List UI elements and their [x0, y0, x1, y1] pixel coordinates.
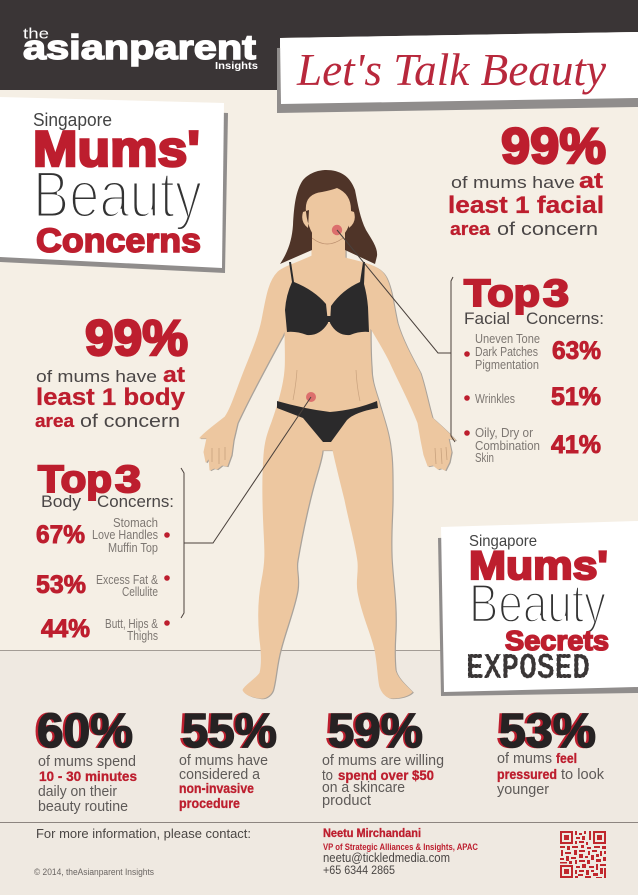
stat: 60% daily routine: 60% — [34, 705, 132, 758]
finger creases — [212, 447, 447, 464]
stat: 59% spend over $50: 59% — [326, 705, 422, 758]
list: facial concerns: Skin — [475, 451, 494, 465]
stat: 53% feel pressured: of mums — [497, 751, 552, 767]
stat: 53% feel pressured: pressured — [497, 766, 557, 782]
stat: 59% spend over $50: spend over $50 — [338, 767, 434, 783]
heading: top 3 body concerns: 3 — [115, 459, 141, 501]
list: body concerns: Stomach — [113, 516, 158, 530]
list: facial concerns: Wrinkles — [475, 392, 515, 406]
panel: Mums' Beauty Concerns: Mums' — [33, 121, 200, 177]
stat: 60% daily routine: 60% — [37, 705, 133, 758]
banner: Let's Talk Beauty — [277, 32, 638, 113]
stat: 60% daily routine — [34, 705, 137, 815]
list: facial concerns: Oily, Dry or — [475, 426, 533, 440]
stat: body 99%: of mums have — [36, 367, 157, 386]
stat: body 99%: at — [163, 362, 186, 387]
briefs — [277, 401, 378, 442]
connector: body to body concerns — [181, 397, 311, 618]
heading: top 3 body concerns: Concerns: — [97, 492, 174, 511]
marker: face concern — [332, 225, 342, 235]
stat: facial 99%: at — [579, 168, 604, 193]
illustration: woman figure — [200, 170, 456, 699]
list: body concerns: Thighs — [127, 629, 158, 643]
stat: facial 99%: 99% — [501, 118, 606, 174]
stat: 59% spend over $50: on a skincare — [322, 780, 405, 796]
list: body concerns: Muffin Top — [108, 541, 158, 555]
list: facial concerns: 51% — [551, 383, 601, 411]
logo: the — [23, 26, 49, 42]
panel: Mums' Beauty Secrets Exposed — [438, 521, 638, 696]
list: body concerns: Cellulite — [122, 585, 158, 599]
logo — [23, 26, 258, 72]
stat: 55% non-invasive: procedure — [179, 795, 240, 811]
header band — [0, 0, 638, 90]
list: body concerns: Excess Fat & — [96, 573, 159, 587]
list: facial concerns: Uneven Tone — [475, 332, 540, 346]
stat: facial 99%: of concern — [497, 219, 598, 239]
stat: body 99% — [35, 310, 188, 431]
stat: 59% spend over $50: 59% — [328, 705, 423, 758]
stat: 55% non-invasive: 55% — [182, 705, 277, 758]
list: body concerns: Love Handles — [92, 528, 158, 542]
footer: contact details: neetu@tickledmedia.com — [323, 851, 450, 865]
stat: body 99%: 99% — [85, 310, 188, 366]
stat: 53% feel pressured: younger — [497, 782, 549, 798]
footer: contact prompt: For more information, please contact: — [36, 826, 251, 841]
stat: facial 99%: least 1 facial — [448, 192, 604, 219]
stat: 55% non-invasive: of mums have — [179, 753, 268, 769]
panel: Mums' Beauty Secrets Exposed: Mums' — [469, 544, 608, 588]
heading: top 3 facial concerns: Concerns: — [526, 309, 604, 328]
stat: facial 99% — [448, 118, 606, 239]
panel: Mums' Beauty Secrets Exposed: Secrets — [505, 625, 609, 656]
panel: Mums' Beauty Concerns: Concerns — [36, 222, 201, 260]
heading: top 3 facial concerns: 3 — [543, 273, 569, 315]
stat: body 99%: area — [35, 411, 75, 431]
panel: Mums' Beauty Concerns — [0, 97, 228, 273]
panel: Mums' Beauty Secrets Exposed: EXPOSED — [466, 648, 590, 689]
footer: contact details: Neetu Mirchandani — [323, 828, 421, 840]
stat: facial 99%: area — [450, 219, 491, 239]
stat: 55% non-invasive — [179, 705, 277, 811]
connector: face to facial concerns — [337, 230, 455, 442]
stat: 53% feel pressured: 53% — [499, 705, 596, 758]
body creases — [293, 370, 360, 401]
stat: 59% spend over $50 — [322, 705, 444, 809]
list: body concerns — [36, 516, 170, 643]
panel: Mums' Beauty Concerns: Beauty — [33, 157, 202, 231]
footer: contact details — [323, 828, 479, 877]
list: facial concerns: Dark Patches — [475, 345, 538, 359]
stat: body 99%: least 1 body — [36, 384, 186, 411]
heading: top 3 facial concerns: Top — [464, 273, 540, 315]
stat: facial 99%: of mums have — [451, 173, 575, 192]
footer: contact details: VP of Strategic Alliances & Insights, APAC — [323, 842, 479, 852]
panel: Mums' Beauty Secrets Exposed: Beauty — [469, 572, 606, 634]
heading: top 3 facial concerns: Facial — [464, 309, 510, 328]
bra — [285, 262, 369, 335]
stat: 53% feel pressured: 53% — [496, 705, 594, 758]
stat: 60% daily routine: beauty routine — [38, 799, 128, 815]
heading: top 3 body concerns: Body — [41, 492, 82, 511]
stat: 59% spend over $50: of mums are willing — [322, 753, 444, 769]
stat: 53% feel pressured — [496, 705, 605, 798]
face and neck — [302, 188, 355, 256]
list: facial concerns: Combination — [475, 439, 540, 453]
list: facial concerns: 41% — [551, 431, 601, 459]
logo: asianparent — [23, 29, 256, 67]
stat: 59% spend over $50: to — [322, 768, 333, 784]
list: body concerns: 53% — [36, 571, 86, 599]
logo: Insights — [215, 60, 258, 72]
marker: body concern — [306, 392, 316, 402]
heading: top 3 body concerns — [38, 459, 174, 511]
stat: 53% feel pressured: to look — [561, 767, 605, 783]
list: body concerns: 44% — [41, 615, 90, 643]
list: facial concerns — [464, 332, 601, 465]
stat: 55% non-invasive: considered a — [179, 767, 261, 783]
list: facial concerns: Pigmentation — [475, 358, 539, 372]
stat: 60% daily routine: 10 - 30 minutes — [39, 768, 137, 784]
stat: 59% spend over $50: product — [322, 793, 371, 809]
icon: QR code — [560, 831, 606, 878]
banner: Let's Talk Beauty: Let's Talk Beauty — [296, 44, 607, 95]
heading: top 3 body concerns: Top — [38, 459, 112, 501]
hair — [280, 170, 377, 264]
panel: Mums' Beauty Secrets Exposed: Singapore — [469, 533, 537, 550]
footer: copyright: © 2014, theAsianparent Insights — [34, 867, 154, 877]
stat: 53% feel pressured: feel — [556, 750, 577, 766]
panel: Mums' Beauty Concerns: Singapore — [33, 109, 112, 130]
stat: 55% non-invasive: 55% — [180, 705, 276, 758]
stat: body 99%: of concern — [80, 411, 180, 431]
stat: 60% daily routine: daily on their — [38, 784, 117, 800]
list: body concerns: 67% — [36, 521, 85, 549]
footer: contact details: +65 6344 2865 — [323, 863, 395, 877]
list: facial concerns: 63% — [552, 337, 601, 365]
stat: 60% daily routine: of mums spend — [38, 754, 136, 770]
stat: 55% non-invasive: non-invasive — [179, 780, 254, 796]
list: body concerns: Butt, Hips & — [105, 617, 159, 631]
heading: top 3 facial concerns — [464, 273, 604, 328]
